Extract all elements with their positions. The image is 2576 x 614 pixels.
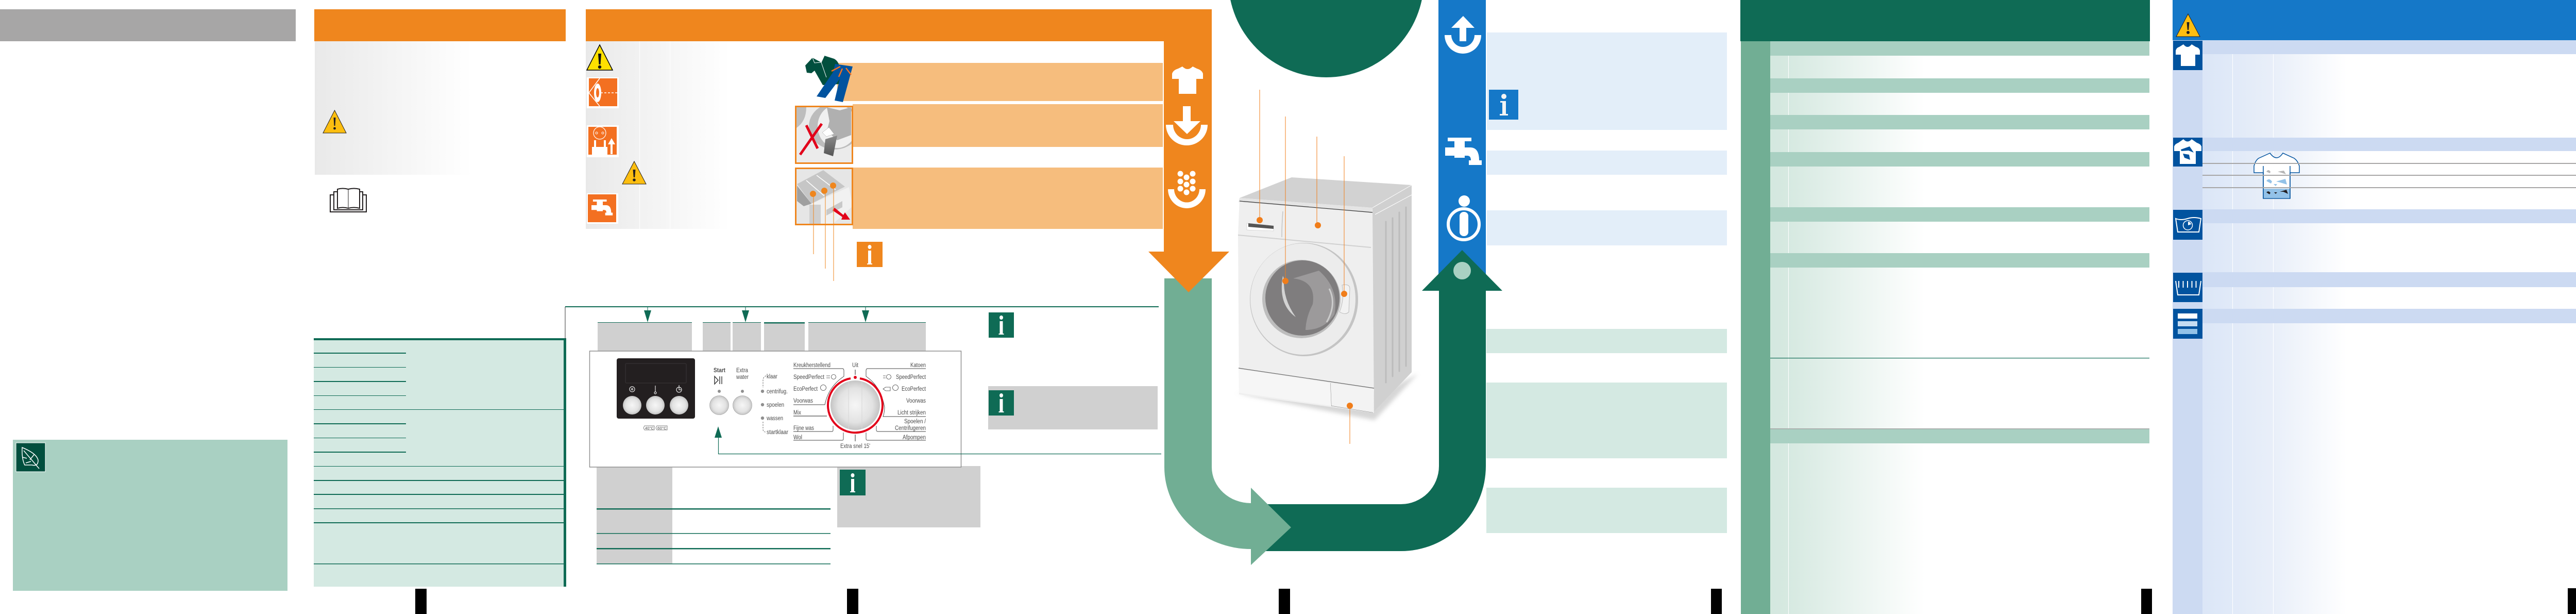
programme dial: Katoen (910, 362, 926, 369)
panel: safety gradient wide (586, 41, 730, 229)
callouts: washer leader lines (1257, 90, 1353, 444)
callouts: drawer compartment leaders (810, 182, 836, 281)
illustration: sock in door (795, 106, 853, 164)
icon: warning blue header (2176, 14, 2200, 37)
icon: wash tub with clock (2173, 210, 2202, 240)
page marker (1711, 589, 1722, 614)
programme dial: Mix (793, 410, 801, 416)
icon: unload arrow (1445, 16, 1481, 54)
programme dial: Centrifugeren (895, 425, 926, 432)
status labels: spoelen (767, 402, 784, 408)
dividers: grey row lines (2202, 163, 2576, 188)
programme dial: Kreukherstellend (793, 362, 831, 369)
display with buttons (617, 358, 695, 419)
icon: t-shirt white (1172, 67, 1203, 94)
panel: control panel (589, 351, 1161, 467)
status labels: centrifug. (767, 389, 788, 395)
panel: blue note 3 (1487, 210, 1727, 245)
icon: basket (2173, 273, 2202, 302)
icon: tap orange (587, 193, 618, 224)
icon: stained t-shirt box (2173, 138, 2202, 167)
programme dial: SpeedPerfect (896, 374, 926, 380)
status labels: klaar (767, 374, 777, 380)
start and extra water buttons (710, 368, 752, 414)
panel: blue note 1 (1487, 32, 1727, 130)
icon: leaf (16, 443, 45, 472)
page marker (1279, 589, 1290, 614)
icon: info orange (857, 242, 883, 267)
programme dial: SpeedPerfect (793, 374, 825, 380)
status labels: wassen (766, 416, 783, 422)
panel: blue care table (2173, 0, 2576, 614)
page marker (415, 589, 427, 614)
programme dial: Licht strijken (897, 410, 926, 416)
status labels (761, 374, 788, 436)
connector: green control line with arrows (565, 306, 1159, 322)
icon: t-shirt box (2173, 41, 2202, 70)
icon: mains plug (587, 125, 619, 157)
illustration: stain t-shirt (2254, 153, 2299, 198)
illustration: washing machine (1236, 177, 1418, 420)
programme dial: Uit (852, 362, 859, 369)
arrow: start button connector (715, 426, 1161, 454)
icon: amber warning (622, 161, 646, 184)
status labels: startklaar (767, 429, 788, 436)
panel: green note 1 (1486, 329, 1727, 353)
page marker (2141, 589, 2152, 614)
panel: blue column (1438, 0, 1486, 278)
icon: light circle on arrow (1453, 262, 1471, 279)
arrow: light green path (1164, 278, 1291, 565)
icon: info green (840, 470, 866, 495)
panel: green note 2 (1486, 383, 1727, 458)
panel: peach step 2 (853, 104, 1163, 147)
programme dial: Spoelen / (904, 419, 926, 425)
programme dial: EcoPerfect (902, 386, 926, 392)
panel: peach step 3 (853, 168, 1163, 229)
start and extra water buttons: Extra (736, 368, 749, 374)
icon: clothes (805, 56, 853, 102)
panel: grey header (0, 9, 296, 41)
icon: load arrow (1166, 106, 1208, 145)
programme dial: Fijne was (793, 425, 814, 432)
programme dial: Extra snel 15' (840, 443, 870, 450)
icon: yellow warning (587, 45, 613, 70)
arrow: dark green path up (1257, 250, 1502, 551)
page marker (847, 589, 858, 614)
panel: green note box (13, 440, 287, 591)
icon: eye (587, 77, 619, 108)
washer door (1250, 243, 1358, 356)
panel: safety gradient (315, 41, 472, 175)
panel: grey labels above control panel (598, 322, 926, 351)
programme dial: Afpompen (903, 435, 926, 441)
panel: info note grey (837, 466, 980, 527)
panel: green note 3 (1486, 488, 1727, 533)
icon: warning triangle (323, 110, 346, 133)
page marker (2568, 588, 2576, 614)
panel: dark green quarter circle (1228, 0, 1424, 77)
start and extra water buttons: water (736, 374, 749, 380)
panel: green troubleshooting table (1740, 0, 2150, 614)
temperature tags (643, 426, 667, 430)
table: specifications (314, 307, 566, 587)
icon: info green second (989, 390, 1014, 416)
panel: blue note 2 (1487, 151, 1727, 175)
illustration: detergent drawer (795, 168, 853, 225)
icon: detergent dots (1168, 171, 1206, 208)
icon: round info (1448, 195, 1479, 240)
start and extra water buttons: Start (714, 368, 725, 374)
temperature tags: 60°C (657, 426, 667, 430)
icon: info blue (1489, 90, 1518, 120)
icon: layered bars (2173, 309, 2202, 339)
temperature tags: 40°C (645, 426, 654, 430)
icon: tap white (1445, 138, 1482, 165)
heading: orange header, safety column (314, 9, 566, 41)
icon: book (330, 189, 366, 212)
arrow: orange header and down arrow (586, 9, 1229, 292)
panel: info note right (988, 386, 1158, 429)
programme dial: EcoPerfect (793, 386, 818, 392)
programme dial (793, 362, 926, 450)
table: grey settings table (597, 467, 831, 564)
programme dial: Wol (793, 435, 802, 441)
icon: info green top (989, 312, 1014, 338)
panel: peach step 1 (837, 63, 1163, 101)
programme dial: Voorwas (906, 398, 926, 404)
programme dial: Voorwas (793, 398, 813, 404)
